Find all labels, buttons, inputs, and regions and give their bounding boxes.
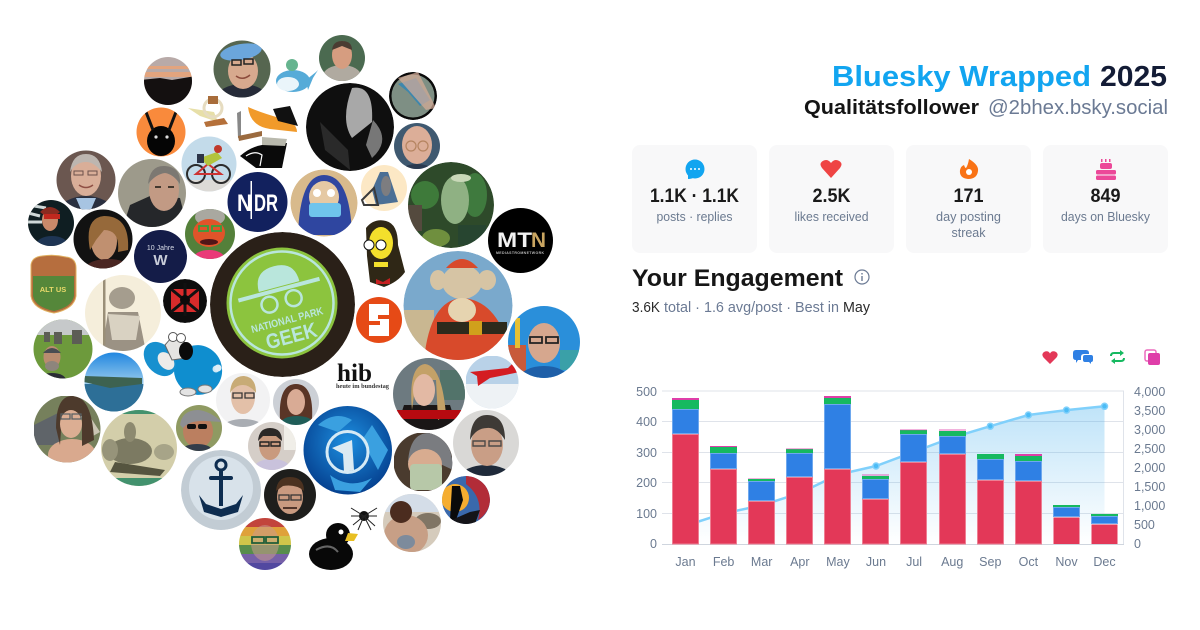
avatar: muppet	[185, 209, 235, 259]
panel: stat posts and replies: posts · replies	[656, 209, 733, 224]
avatar: sunset	[144, 57, 192, 105]
heading: your engagement: Your Engagement	[632, 265, 843, 292]
pink quotes bars	[672, 396, 1042, 479]
avatar: river skyline	[84, 352, 144, 414]
avatar: cyclist	[182, 136, 236, 192]
subtitle: display name and handle: @2bhex.bsky.social	[988, 97, 1168, 119]
left axis labels: 300	[636, 446, 657, 460]
panel: stat likes received: likes received	[794, 209, 868, 224]
panel: stat posts and replies	[632, 145, 757, 253]
subtitle: display name and handle	[804, 97, 1168, 119]
avatar: legs in black ring	[389, 72, 437, 120]
stacked bar and cumulative line chart	[636, 385, 1165, 569]
avatar: smiling man	[319, 35, 365, 81]
blue replies bars	[672, 404, 1118, 524]
month labels: Apr	[790, 555, 810, 569]
right axis labels: 2,500	[1134, 442, 1165, 456]
avatar: 10 Jahre W	[134, 230, 187, 283]
cumulative line	[686, 403, 1108, 526]
avatar: Tagesschau globe	[303, 406, 392, 495]
avatar: hiker silhouette	[441, 476, 490, 524]
title: Bluesky Wrapped	[832, 61, 1091, 93]
icon: replies legend	[1073, 350, 1093, 364]
avatar: older man with glasses	[453, 410, 519, 476]
avatar: drawn face with mask	[290, 170, 358, 236]
avatar: Tyrion	[74, 210, 132, 268]
panel: stat likes received: 2.5K	[812, 186, 851, 207]
avatar: Stonehenge selfie	[34, 320, 92, 378]
left axis labels: 100	[636, 507, 657, 521]
month labels: Oct	[1019, 555, 1039, 569]
avatar: MTN logo: N	[531, 229, 546, 252]
icon: quotes legend	[1145, 350, 1160, 365]
avatar: black and white woman	[306, 83, 394, 171]
right axis labels: 1,500	[1134, 480, 1165, 494]
panel: stat day posting streak: day posting	[936, 209, 1001, 224]
month labels: Jun	[866, 555, 886, 569]
avatar: hib logo: hib	[337, 360, 372, 387]
avatar: NDR logo	[228, 172, 288, 232]
avatar: horn and hobby horse	[188, 96, 228, 127]
left axis labels: 500	[636, 385, 657, 399]
avatar: bald man at harbor	[508, 306, 580, 378]
avatar: bald man with round glasses	[394, 123, 440, 169]
avatar: man with moustache	[264, 469, 316, 521]
avatar: NDR logo: DR	[254, 190, 278, 217]
green reposts bars	[672, 398, 1118, 516]
avatar: rainbow portrait	[239, 518, 291, 571]
engagement summary line: May	[843, 300, 871, 316]
panel: stat days on Bluesky: days on Bluesky	[1061, 209, 1150, 224]
avatar: man in black hoodie	[118, 159, 186, 227]
panel: stat posts and replies: 1.1K · 1.1K	[650, 186, 739, 207]
avatar: NDR logo: N	[237, 190, 252, 217]
engagement summary line: total · 1.6 avg/post · Best in	[664, 300, 839, 316]
avatar: anchor bottle cap	[181, 450, 261, 530]
month labels	[675, 555, 1116, 569]
avatar: man with black glasses	[248, 422, 296, 470]
avatar: old sketch on cream	[101, 410, 177, 487]
subtitle: display name and handle: Qualitätsfollower	[804, 97, 979, 119]
left axis labels: 200	[636, 476, 657, 490]
right axis labels	[1134, 385, 1165, 551]
avatar: Santa koala	[404, 251, 512, 362]
panel: stat days on Bluesky: 849	[1090, 186, 1120, 207]
avatar: National Park Geek badge: GEEK	[263, 319, 320, 354]
avatar: red plane over snow	[466, 356, 520, 409]
avatar bubble cluster	[28, 35, 580, 571]
icon: birthday cake	[1096, 159, 1116, 180]
avatar: elephant tattoo on back	[383, 494, 441, 555]
month labels: Sep	[979, 555, 1001, 569]
left axis labels: 400	[636, 415, 657, 429]
avatar: hib logo	[336, 360, 390, 390]
avatar: MTN logo: MEDIASTROMNETWORK	[496, 251, 544, 255]
right axis labels: 500	[1134, 518, 1155, 532]
avatar: Batman with walker	[361, 165, 407, 211]
avatar: whale	[276, 59, 318, 92]
avatar: blue cartoon character	[137, 332, 229, 402]
month labels: Jul	[906, 555, 922, 569]
icon: likes legend	[1042, 351, 1058, 364]
left axis labels	[636, 385, 657, 551]
avatar: moss closeup	[408, 162, 494, 248]
left axis labels: 0	[650, 537, 657, 551]
panel: stat day posting streak: streak	[952, 225, 986, 240]
right axis labels: 2,000	[1134, 461, 1165, 475]
month labels: May	[826, 555, 850, 569]
month labels: Aug	[941, 555, 963, 569]
right axis labels: 3,500	[1134, 404, 1165, 418]
avatar: woman with glasses outdoors	[34, 396, 100, 462]
avatar: Alt US badge: ALT US	[40, 285, 66, 294]
avatar: MTN logo: MT	[497, 229, 532, 252]
right axis labels: 3,000	[1134, 423, 1165, 437]
avatar: 10 Jahre W: 10 Jahre	[147, 245, 174, 252]
icon: flame	[960, 159, 978, 179]
avatar: woman with beanie and mug	[394, 433, 453, 491]
avatar: MTN logo	[488, 208, 553, 273]
icon: info	[855, 270, 869, 284]
avatar: man in blue cap	[214, 40, 270, 98]
month labels: Dec	[1093, 555, 1116, 569]
avatar: 10 Jahre W: W	[153, 252, 168, 269]
avatar: orange S logo	[356, 297, 402, 343]
avatar: hib logo: heute im bundestag	[336, 383, 390, 390]
panel: stat days on Bluesky	[1043, 145, 1168, 253]
title: 2025	[1100, 61, 1167, 93]
month labels: Mar	[751, 555, 772, 569]
avatar: woman on news broadcast	[393, 358, 465, 430]
avatar: National Park Geek badge	[210, 232, 355, 377]
panel: stat day posting streak: 171	[954, 186, 984, 207]
avatar: woman with red sunglasses	[28, 200, 74, 246]
panel: stat likes received	[769, 145, 894, 253]
avatar: armored knight cat	[85, 275, 161, 352]
chart legend icons	[1042, 350, 1160, 365]
avatar: black rubber duck	[309, 523, 358, 570]
avatar: yellow cartoon with beard	[364, 220, 405, 287]
avatar: blond man with glasses	[216, 373, 270, 427]
avatar: woman with brown hair	[273, 379, 319, 430]
month labels: Jan	[675, 555, 696, 569]
avatar: man with rimless glasses	[56, 150, 116, 210]
cumulative area	[686, 406, 1104, 544]
avatar: man with cap and sunglasses	[176, 405, 222, 454]
engagement summary line: 3.6K	[632, 300, 660, 316]
right axis labels: 4,000	[1134, 385, 1165, 399]
avatar: orange with black bug	[136, 108, 186, 156]
month labels: Nov	[1055, 555, 1078, 569]
icon: speech bubble	[686, 160, 704, 179]
red likes bars	[672, 434, 1118, 544]
icon: reposts legend	[1110, 350, 1125, 364]
icon: heart	[820, 160, 842, 178]
avatar: spider	[351, 508, 377, 530]
right axis labels: 1,000	[1134, 499, 1165, 513]
avatar: red-black emblem	[163, 279, 207, 323]
right axis labels: 0	[1134, 537, 1141, 551]
avatar: Daffy Duck	[237, 106, 298, 168]
panel: stat day posting streak	[906, 145, 1031, 253]
month labels: Feb	[713, 555, 734, 569]
avatar: Alt US badge	[31, 255, 76, 313]
avatar: National Park Geek badge: NATIONAL PARK	[250, 305, 325, 336]
